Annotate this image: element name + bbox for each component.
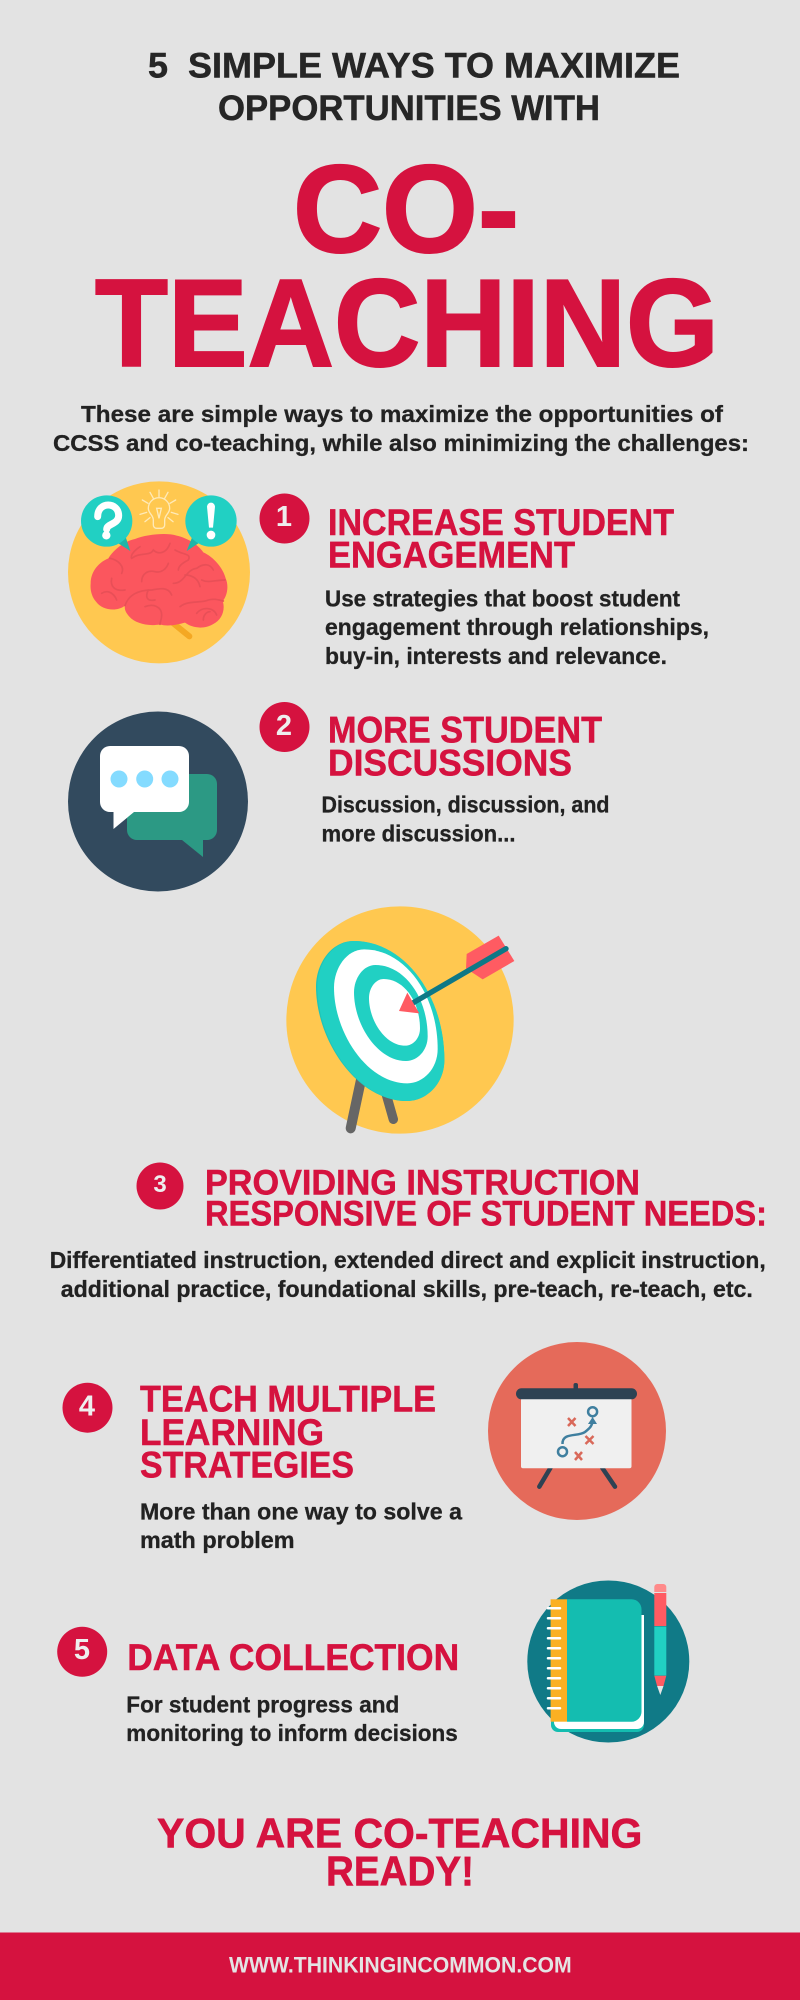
title: intro heading: 5 SIMPLE WAYS TO MAXIMIZE — [148, 46, 680, 86]
heading: teach multiple learning strategies: TEACH MULTIPLE — [140, 1379, 436, 1420]
closing message: YOU ARE CO-TEACHING — [157, 1809, 642, 1856]
body text step 1 — [325, 586, 709, 669]
step number 2: 2 — [276, 710, 292, 742]
heading: data collection: DATA COLLECTION — [127, 1637, 459, 1678]
title: intro heading: OPPORTUNITIES WITH — [218, 88, 600, 128]
body text step 2 — [322, 792, 610, 846]
step number 4 — [62, 1383, 112, 1433]
heading: more student discussions — [328, 710, 602, 784]
footer bar with website — [0, 1932, 800, 2000]
body text step 3 — [50, 1247, 766, 1302]
heading: increase student engagement: ENGAGEMENT — [328, 534, 575, 576]
heading: teach multiple learning strategies: STRATEGIES — [140, 1445, 354, 1486]
intro text: CCSS and co-teaching, while also minimizing the challenges: — [53, 430, 749, 456]
body text step 4: math problem — [140, 1527, 294, 1553]
closing message: READY! — [326, 1848, 474, 1895]
body text step 1: Use strategies that boost student — [325, 586, 680, 612]
body text step 1: buy-in, interests and relevance. — [325, 643, 667, 669]
body text step 3: additional practice, foundational skills, pre-teach, re-teach, etc. — [61, 1276, 753, 1302]
heading: teach multiple learning strategies: LEARNING — [140, 1412, 324, 1453]
body text step 4: More than one way to solve a — [140, 1498, 462, 1524]
title: CO-TEACHING: TEACHING — [95, 255, 719, 393]
body text step 2: Discussion, discussion, and — [322, 792, 610, 818]
title: CO-TEACHING — [95, 141, 719, 393]
heading: teach multiple learning strategies — [140, 1379, 436, 1486]
heading: providing instruction responsive of student needs: PROVIDING INSTRUCTION — [205, 1163, 640, 1202]
heading: providing instruction responsive of student needs: RESPONSIVE OF STUDENT NEEDS: — [205, 1195, 767, 1234]
body text step 2: more discussion... — [322, 820, 516, 846]
panel: step 2 more student discussions — [68, 702, 610, 892]
icon: notebook and pencil — [527, 1580, 689, 1742]
heading: providing instruction responsive of student needs — [205, 1163, 767, 1234]
panel: step 4 teach multiple learning strategies — [62, 1342, 666, 1553]
icon: brain with speech bubbles — [68, 481, 250, 663]
body text step 5 — [126, 1691, 458, 1746]
icon: presentation board — [488, 1342, 666, 1520]
step number 5: 5 — [74, 1634, 90, 1666]
icon: target with arrow — [286, 906, 514, 1134]
intro text — [53, 401, 749, 456]
step number 3: 3 — [153, 1171, 167, 1198]
step number 2 — [260, 702, 310, 752]
body text step 4 — [140, 1498, 462, 1553]
step number 4: 4 — [79, 1390, 95, 1422]
closing message — [157, 1809, 642, 1895]
body text step 5: monitoring to inform decisions — [126, 1720, 458, 1746]
icon: speech bubbles — [68, 712, 248, 892]
step number 1: 1 — [276, 501, 292, 533]
title: CO-TEACHING: CO- — [293, 141, 519, 279]
panel: step 3 responsive instruction — [50, 1162, 767, 1302]
title: intro heading — [148, 46, 680, 128]
heading: more student discussions: MORE STUDENT — [328, 710, 602, 750]
intro text: These are simple ways to maximize the opportunities of — [81, 401, 723, 427]
heading: more student discussions: DISCUSSIONS — [328, 742, 572, 784]
footer bar with website: WWW.THINKINGINCOMMON.COM — [229, 1952, 572, 1977]
heading: increase student engagement: INCREASE STUDENT — [328, 502, 674, 543]
heading: increase student engagement — [328, 502, 674, 576]
step number 3 — [136, 1162, 184, 1210]
step number 1 — [260, 494, 310, 544]
body text step 5: For student progress and — [126, 1691, 399, 1717]
panel: step 5 data collection — [57, 1580, 689, 1746]
body text step 3: Differentiated instruction, extended direct and explicit instruction, — [50, 1247, 766, 1273]
panel: step 1 increase student engagement — [68, 481, 709, 669]
step number 5 — [57, 1627, 107, 1677]
body text step 1: engagement through relationships, — [325, 614, 709, 640]
